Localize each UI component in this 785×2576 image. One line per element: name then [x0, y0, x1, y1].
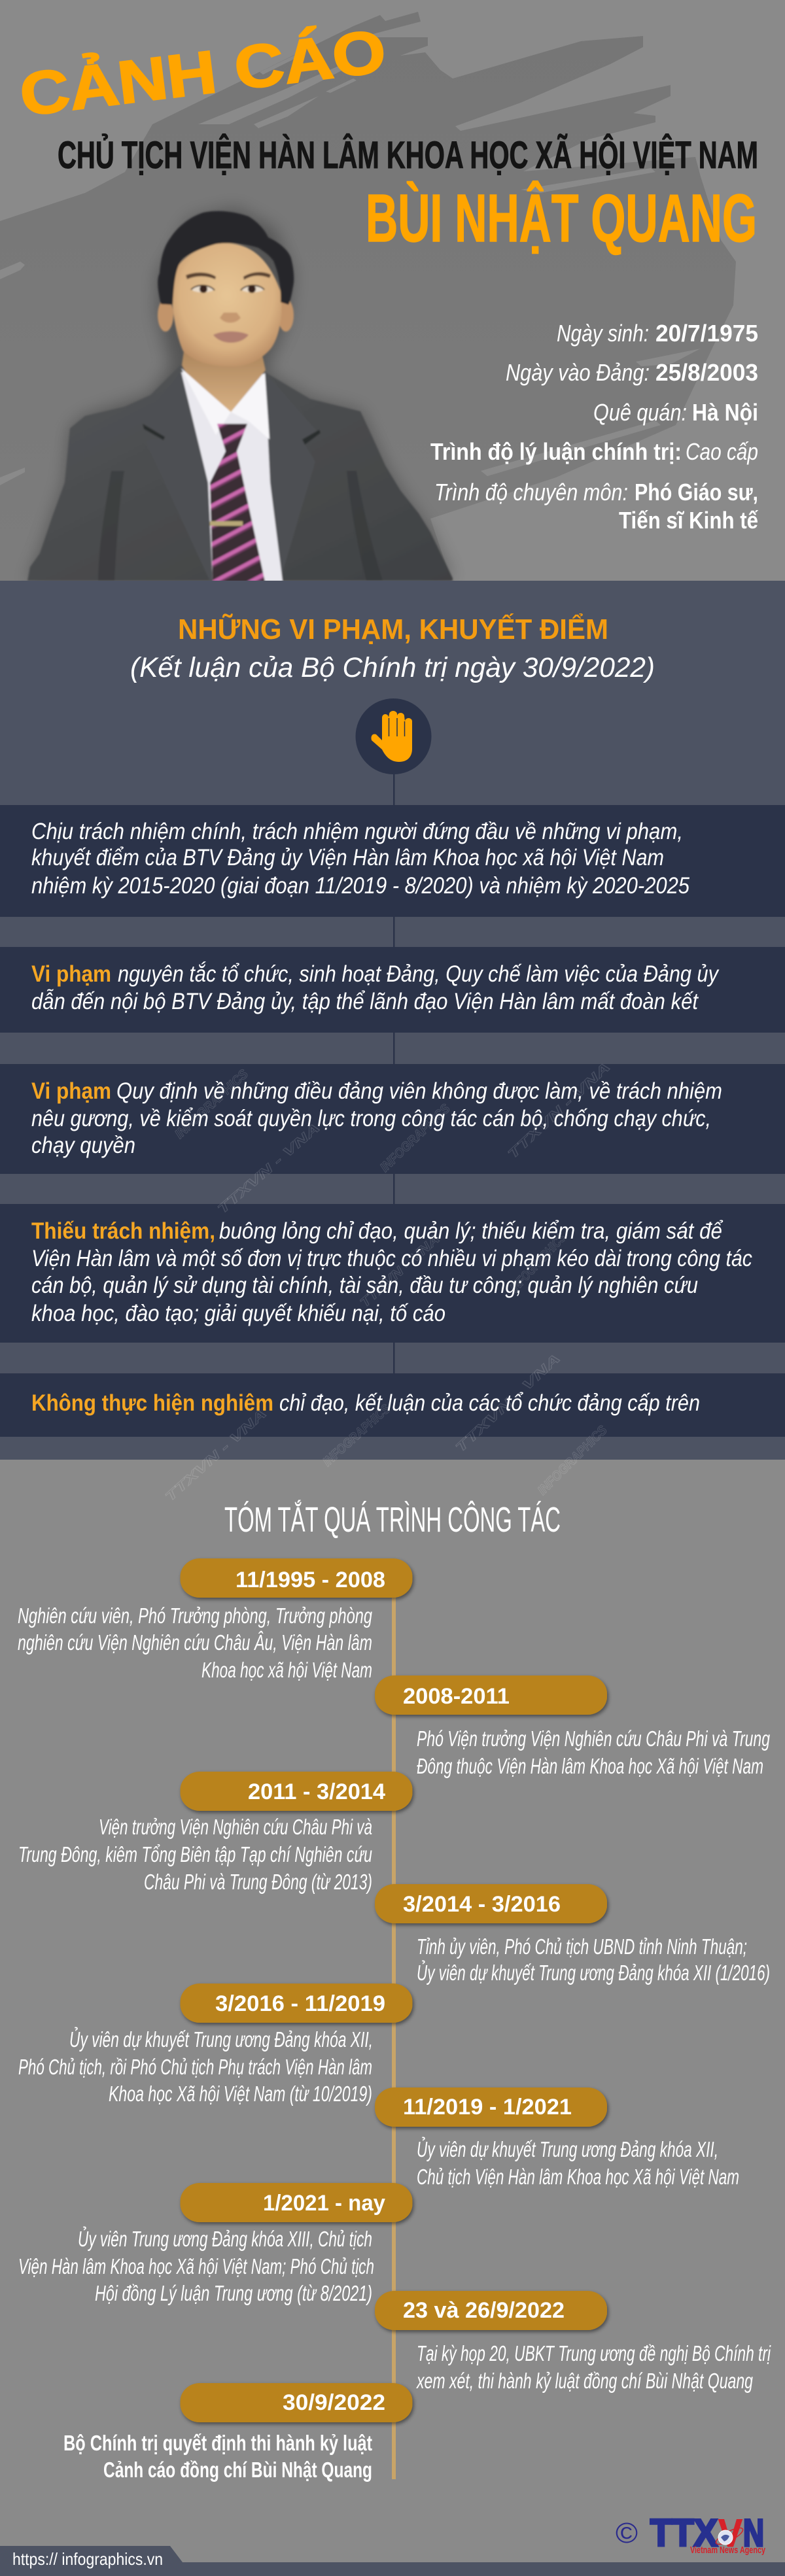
personal info block — [430, 320, 759, 534]
timeline entry 2: 2008-2011 — [403, 1684, 510, 1709]
timeline entry 5 — [18, 1984, 412, 2106]
panel: responsibility — [0, 805, 785, 917]
timeline entry 4: 3/2014 - 3/2016 — [403, 1892, 561, 1917]
panel: regulation violations: chạy quyền — [31, 1133, 135, 1158]
timeline entry 9: Bộ Chính trị quyết định thi hành kỷ luật — [63, 2431, 372, 2455]
watermark: TTXVN - VNA — [505, 1060, 613, 1162]
timeline entry 7 — [18, 2183, 412, 2305]
timeline entry 7: Ủy viên Trung ương Đảng khóa XIII, Chủ tịch — [78, 2226, 372, 2251]
timeline entry 5: Phó Chủ tịch, rồi Phó Chủ tịch Phụ trách Viện Hàn lâm — [18, 2055, 372, 2079]
logo: TTXVN: © — [616, 2517, 638, 2549]
watermark: INFOGRAPHICS — [321, 1401, 393, 1469]
timeline entry 3: 2011 - 3/2014 — [248, 1779, 385, 1804]
watermark: INFOGRAPHICS — [377, 1101, 453, 1175]
timeline entry 7: Viện Hàn lâm Khoa học Xã hội Việt Nam; Phó Chủ tịch — [18, 2254, 374, 2278]
logo: TTXVN: N — [743, 2512, 764, 2554]
timeline entry 7: 1/2021 - nay — [263, 2191, 385, 2216]
panel: organisational violations — [0, 947, 785, 1033]
panel: failure to implement directives: Không thực hiện nghiêm — [31, 1390, 273, 1416]
timeline entry 3: Châu Phi và Trung Đông (từ 2013) — [144, 1870, 372, 1894]
panel: lack of responsibility: Thiếu trách nhiệm, — [31, 1218, 215, 1244]
timeline entry 8: 23 và 26/9/2022 — [403, 2298, 565, 2323]
timeline entry 5: Ủy viên dự khuyết Trung ương Đảng khóa XII, — [69, 2027, 373, 2052]
timeline entry 6: 11/2019 - 1/2021 — [403, 2095, 572, 2120]
panel: lack of responsibility: cán bộ, quản lý sử dụng tài chính, tài sản, đầu tư công; quản lý nghiên cứu — [31, 1273, 698, 1298]
timeline axis — [392, 1596, 396, 2479]
info: political theory level: Cao cấp — [686, 438, 758, 465]
title: CẢNH CÁO: CẢNH CÁO — [16, 17, 389, 129]
watermark: TTXVN - VNA — [163, 1407, 270, 1505]
panel: regulation violations: Vi phạm — [31, 1078, 111, 1104]
timeline entry 5: 3/2016 - 11/2019 — [215, 1991, 385, 2016]
info: party admission date: Ngày vào Đảng: — [506, 359, 650, 386]
violations subheading: (Kết luận của Bộ Chính trị ngày 30/9/2022) — [130, 652, 655, 683]
info: professional level: Phó Giáo sư, — [635, 479, 758, 506]
watermark: INFOGRAPHICS — [535, 1423, 610, 1498]
panel: lack of responsibility: khoa học, đào tạo; giải quyết khiếu nại, tố cáo — [31, 1301, 445, 1326]
logo: TTXVN — [616, 2511, 765, 2556]
timeline entry 9 — [63, 2383, 412, 2482]
panel: responsibility: khuyết điểm của BTV Đảng ủy Viện Hàn lâm Khoa học xã hội Việt Nam — [31, 845, 664, 870]
timeline entry 9: Cảnh cáo đồng chí Bùi Nhật Quang — [103, 2458, 372, 2482]
violations heading: NHỮNG VI PHẠM, KHUYẾT ĐIỂM — [178, 612, 608, 645]
timeline entry 4 — [375, 1884, 770, 1985]
timeline entry 1: Khoa học xã hội Việt Nam — [201, 1658, 372, 1682]
brush stroke background — [0, 12, 736, 581]
watermark: TTXVN - VNA — [453, 1351, 563, 1456]
info: birth date — [557, 320, 758, 347]
timeline entry 2 — [375, 1675, 770, 1778]
timeline entry 1: nghiên cứu Viện Nghiên cứu Châu Âu, Viện Hàn lâm — [18, 1630, 372, 1655]
timeline entry 8 — [375, 2291, 771, 2393]
footer: https:// infographics.vn — [12, 2549, 163, 2569]
connector line — [393, 774, 395, 1390]
watermark: INFOGRAPHICS — [172, 1067, 251, 1142]
panel: responsibility: Chịu trách nhiệm chính, trách nhiệm người đứng đầu về những vi phạm, — [31, 819, 683, 844]
timeline heading: TÓM TẮT QUÁ TRÌNH CÔNG TÁC — [224, 1500, 561, 1539]
panel: failure to implement directives — [0, 1373, 785, 1437]
timeline entry 1: Nghiên cứu viên, Phó Trưởng phòng, Trưởng phòng — [18, 1604, 372, 1628]
panel: lack of responsibility — [0, 1204, 785, 1343]
panel: regulation violations: Quy định về những điều đảng viên không được làm, về trách nhiệm — [116, 1078, 722, 1104]
panel: organisational violations: nguyên tắc tổ chức, sinh hoạt Đảng, Quy chế làm việc của Đảng ủy — [118, 961, 720, 987]
footer — [0, 2546, 785, 2576]
info: political theory level: Trình độ lý luận chính trị: — [430, 438, 682, 465]
timeline entry 9: 30/9/2022 — [283, 2390, 385, 2415]
watermark: INFOGRAPHICS — [508, 1231, 569, 1295]
watermark: TTXVN - VNA — [358, 1232, 443, 1311]
info: birth date: 20/7/1975 — [655, 320, 758, 347]
timeline entry 3 — [18, 1772, 412, 1894]
panel: failure to implement directives: chỉ đạo, kết luận của các tổ chức đảng cấp trên — [279, 1390, 700, 1416]
panel: lack of responsibility: buông lỏng chỉ đạo, quản lý; thiếu kiểm tra, giám sát để — [219, 1218, 723, 1244]
timeline entry 3: Trung Đông, kiêm Tổng Biên tập Tạp chí Nghiên cứu — [18, 1842, 372, 1866]
panel: responsibility: nhiệm kỳ 2015-2020 (giai đoạn 11/2019 - 8/2020) và nhiệm kỳ 2020-2025 — [31, 873, 689, 899]
info: party admission date — [506, 359, 758, 386]
logo: TTXVN: V — [718, 2511, 742, 2555]
timeline entry 7: Hội đồng Lý luận Trung ương (từ 8/2021) — [95, 2281, 372, 2305]
info: professional level: Trình độ chuyên môn: — [434, 479, 628, 506]
info: hometown: Hà Nội — [692, 399, 758, 426]
info: professional level: Tiến sĩ Kinh tế — [619, 507, 759, 534]
info: birth date: Ngày sinh: — [557, 320, 649, 347]
info: hometown — [593, 399, 758, 426]
panel: regulation violations — [0, 1064, 785, 1174]
panel: violations section background — [0, 581, 785, 1460]
timeline entry 1: 11/1995 - 2008 — [236, 1568, 385, 1592]
timeline entry 1 — [18, 1558, 412, 1682]
watermark: TTXVN - VNA — [215, 1121, 323, 1217]
portrait photo — [27, 208, 453, 581]
timeline entry 5: Khoa học Xã hội Việt Nam (từ 10/2019) — [109, 2082, 372, 2106]
panel: organisational violations: dẫn đến nội bộ BTV Đảng ủy, tập thể lãnh đạo Viện Hàn lâm mất đoàn kết — [31, 989, 699, 1014]
panel: organisational violations: Vi phạm — [31, 961, 111, 987]
icon: raised hand — [356, 698, 432, 774]
info: party admission date: 25/8/2003 — [655, 359, 758, 386]
watermark — [163, 1060, 613, 1505]
info: professional level — [434, 479, 759, 534]
timeline entry 6 — [375, 2087, 739, 2189]
timeline entry 3: Viện trưởng Viện Nghiên cứu Châu Phi và — [99, 1815, 372, 1839]
info: hometown: Quê quán: — [593, 399, 687, 426]
logo: TTXVN: TTX — [650, 2512, 718, 2554]
